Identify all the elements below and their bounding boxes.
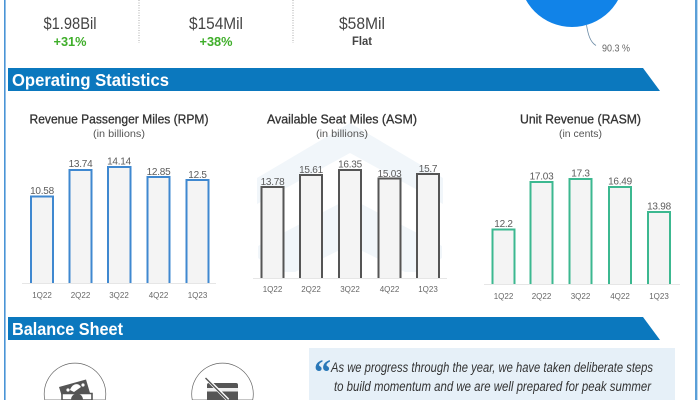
- heading: Balance Sheet: [8, 317, 660, 340]
- icon: cash: [44, 363, 106, 400]
- bar chart: RASM: 17.03: [530, 172, 554, 182]
- heading: Operating Statistics: [8, 68, 660, 91]
- bar chart: RASM: 13.98: [647, 202, 672, 212]
- stat: revenue: [44, 15, 96, 49]
- stat: operating income: $154Mil: [189, 15, 243, 33]
- bar chart: RPM: Revenue Passenger Miles (RPM): [30, 112, 208, 126]
- bar chart: ASM: 3Q22: [340, 285, 360, 294]
- bar chart: RPM: 2Q22: [71, 291, 91, 300]
- stat: revenue: +31%: [54, 34, 87, 49]
- bar chart: RASM: 2Q22: [532, 292, 552, 301]
- stat: net income: $58Mil: [339, 15, 385, 33]
- stat: operating income: [189, 15, 243, 49]
- bar chart: RASM: 17.3: [571, 168, 590, 180]
- bar chart: ASM: 15.61: [299, 165, 324, 176]
- bar chart: RPM: 4Q22: [149, 291, 169, 300]
- bar chart: RPM: 12.5: [188, 170, 207, 181]
- bar chart: ASM: 4Q22: [380, 285, 400, 294]
- bar chart: RPM: 3Q22: [109, 291, 129, 300]
- bar chart: RPM: 10.58: [30, 186, 55, 197]
- bar chart: RASM: 3Q22: [571, 292, 591, 301]
- bar chart: ASM: 1Q23: [418, 285, 438, 294]
- bar chart: RASM: 4Q22: [610, 292, 630, 301]
- stat: operating income: +38%: [200, 34, 233, 49]
- bar chart: ASM: 16.35: [338, 160, 363, 170]
- icon: crossed-out credit card: [192, 363, 253, 400]
- pie chart: load factor: [519, 0, 630, 55]
- stat: revenue: $1.98Bil: [44, 15, 96, 33]
- heading: Operating Statistics: Operating Statistics: [12, 70, 169, 90]
- bar chart: RPM: 13.74: [69, 159, 93, 170]
- bar chart: RASM: Unit Revenue (RASM): [520, 112, 641, 126]
- panel: financial stats: [44, 0, 385, 49]
- bar chart: ASM: 13.78: [261, 177, 285, 188]
- bar chart: RPM: (in billions): [93, 128, 145, 140]
- bar chart: RASM: 12.2: [494, 219, 513, 230]
- pie chart: load factor: 90.3 %: [602, 42, 630, 54]
- quote text: [330, 360, 653, 394]
- bar chart: RPM: 1Q22: [32, 291, 52, 300]
- watermark: chevrons: [257, 123, 443, 272]
- bar chart: RPM: 1Q23: [188, 291, 208, 300]
- bar chart: RASM: 1Q23: [649, 292, 669, 301]
- bar chart: ASM: 2Q22: [301, 285, 321, 294]
- bar chart: RPM: 12.85: [147, 167, 171, 178]
- bar chart: ASM: 1Q22: [263, 285, 283, 294]
- bar chart: RPM: [22, 112, 216, 300]
- heading: Balance Sheet: Balance Sheet: [12, 319, 123, 339]
- bar chart: RASM: [484, 112, 680, 301]
- bar chart: ASM: 15.03: [378, 169, 402, 180]
- bar chart: ASM: [253, 112, 447, 294]
- bar chart: ASM: 15.7: [419, 164, 438, 175]
- bar chart: RASM: 1Q22: [494, 292, 514, 301]
- stat: net income: [339, 15, 385, 48]
- bar chart: ASM: Available Seat Miles (ASM): [267, 112, 417, 126]
- icon: quotation mark: “: [314, 352, 331, 392]
- bar chart: RPM: 14.14: [107, 156, 132, 168]
- bar chart: RASM: (in cents): [559, 128, 602, 140]
- stat: net income: Flat: [352, 36, 372, 48]
- panel: quote: [309, 348, 675, 400]
- quote text: to build momentum and we are well prepared for peak summer: [334, 379, 651, 394]
- bar chart: ASM: (in billions): [316, 128, 368, 140]
- bar chart: RASM: 16.49: [608, 176, 633, 188]
